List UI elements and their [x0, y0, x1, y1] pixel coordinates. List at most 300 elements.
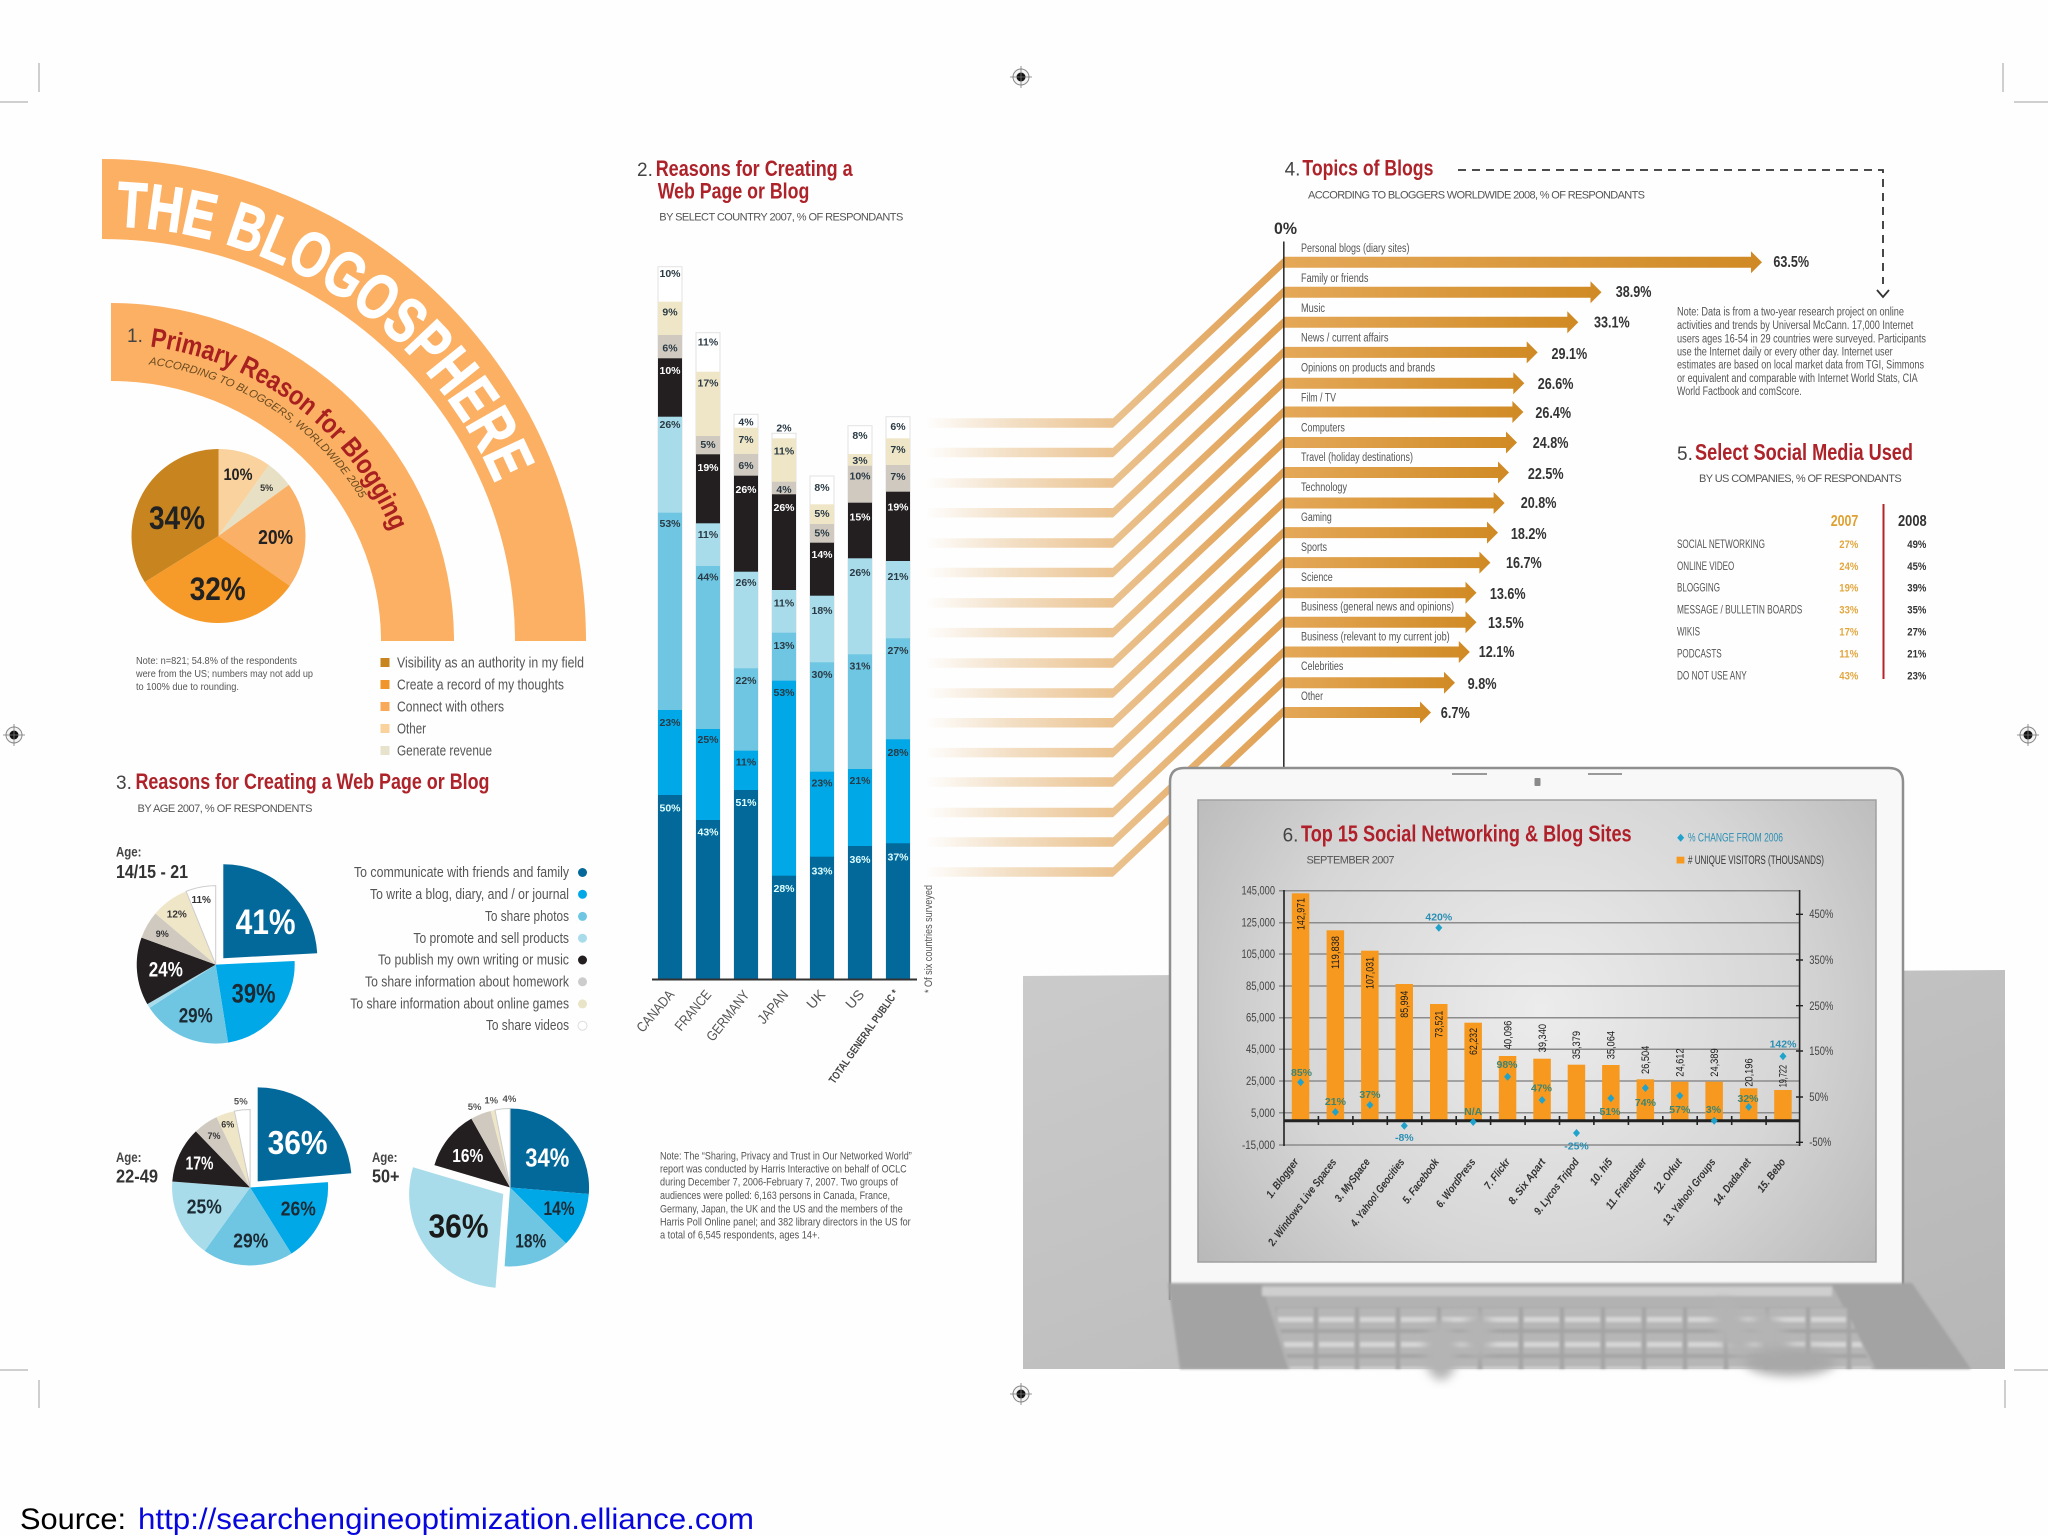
bar: total general public: 19% — [887, 502, 909, 514]
topic names: Business (relevant to my current job) — [1301, 632, 1450, 644]
bar values: 19,722 — [1778, 1065, 1790, 1087]
right axis labels: 350% — [1809, 955, 1833, 967]
left axis labels — [1242, 886, 1275, 1152]
topic values: 9.8% — [1468, 676, 1497, 693]
note: section 4: users ages 16-54 in 29 countries were surveyed. Participants — [1677, 333, 1926, 345]
table: social media by year: SOCIAL NETWORKING — [1677, 537, 1765, 551]
title arc: The Blogosphere: THE BLOGOSPHERE — [118, 181, 535, 482]
bar: UK: 23% — [811, 778, 833, 790]
site name labels: 2. Windows Live Spaces — [1266, 1157, 1339, 1249]
stacked bar chart: reasons by country — [652, 267, 917, 980]
table: social media by year: 49% — [1907, 539, 1926, 551]
topic names: Other — [1301, 691, 1323, 703]
topic names: Celebrities — [1301, 661, 1344, 673]
topic values: 33.1% — [1594, 315, 1630, 332]
bar: Canada: 23% — [659, 717, 681, 729]
table: social media by year: MESSAGE / BULLETIN BOARDS — [1677, 603, 1802, 617]
note: section 2: Note: The “Sharing, Privacy and Trust in Our Networked World” — [660, 1150, 912, 1162]
bar values: 119,838 — [1330, 936, 1342, 969]
percent change labels: 420% — [1425, 912, 1453, 924]
hands on keyboard — [1424, 1293, 1835, 1380]
table: social media by year: DO NOT USE ANY — [1677, 668, 1747, 682]
heading: section 4: 4. — [1285, 160, 1300, 181]
bar: Canada: 50% — [659, 802, 681, 814]
legend: primary reason: Visibility as an authority in my field — [397, 656, 584, 672]
bar: US — [848, 426, 872, 979]
percent change labels: 32% — [1737, 1093, 1759, 1105]
heading: section 4: Topics of Blogs — [1302, 156, 1433, 181]
bar: UK: 5% — [814, 528, 830, 540]
right axis labels: 450% — [1809, 909, 1833, 921]
legend: reasons by age: To share videos — [486, 1018, 569, 1034]
left axis labels: 125,000 — [1242, 918, 1275, 930]
bar: France: 5% — [700, 439, 716, 451]
right axis labels: 150% — [1809, 1046, 1833, 1058]
percent change labels: 85% — [1291, 1067, 1313, 1079]
heading: section 6 — [1283, 821, 1632, 866]
bar values: 20,196 — [1743, 1058, 1755, 1087]
topic values: 26.6% — [1538, 376, 1574, 393]
pie chart: age 50+: 1% — [484, 1096, 499, 1106]
percent change labels: N/A — [1464, 1106, 1483, 1118]
gridlines — [1279, 891, 1800, 1145]
table: social media by year: 19% — [1839, 583, 1858, 595]
table: social media by year: 33% — [1839, 605, 1858, 617]
chart legend: % CHANGE FROM 2006 — [1688, 833, 1783, 845]
note: section 4 — [1677, 307, 1926, 398]
bar: Germany: 22% — [735, 675, 757, 687]
bar values: 40,096 — [1502, 1021, 1514, 1049]
laptop screen — [1198, 800, 1876, 1262]
topic names: News / current affairs — [1301, 333, 1389, 345]
bar: France: 44% — [697, 572, 719, 584]
country labels: UK — [803, 986, 829, 1012]
heading: section 5 — [1677, 439, 1913, 485]
arrow: dashed pointer to note — [1458, 170, 1889, 297]
registration mark: bottom — [1010, 1383, 1032, 1405]
legend: reasons by age: To publish my own writing or music — [378, 952, 569, 968]
percent change labels: 51% — [1599, 1106, 1621, 1118]
label: age 22-49 — [116, 1149, 158, 1186]
bar values: 35,064 — [1606, 1031, 1618, 1059]
pie chart: age 50+: 36% — [428, 1208, 488, 1244]
site name labels: 7. Flickr — [1482, 1156, 1513, 1192]
heading: section 3: Reasons for Creating a Web Page or Blog — [136, 769, 490, 794]
registration mark: top — [1010, 66, 1032, 88]
bar: Canada: 6% — [662, 342, 678, 354]
topic values: 29.1% — [1552, 346, 1587, 363]
heading: section 5: BY US COMPANIES, % OF RESPONDANTS — [1699, 473, 1902, 485]
legend: reasons by age: To promote and sell products — [413, 931, 569, 947]
pie chart: age 22-49: 5% — [234, 1096, 248, 1108]
country labels: CANADA — [633, 986, 678, 1035]
bar: total general public: 7% — [890, 444, 906, 456]
country labels: TOTAL GENERAL PUBLIC * — [827, 987, 902, 1086]
pie chart: primary reason — [131, 449, 306, 623]
country labels: US — [842, 986, 867, 1012]
percent change labels — [1291, 912, 1797, 1152]
panel: primary reason for blogging — [111, 303, 584, 760]
note: section 4: Note: Data is from a two-year research project on online — [1677, 307, 1904, 319]
bar: Japan: 4% — [776, 484, 792, 496]
note: section 2: during December 7, 2006-February 7, 2007. Two groups of — [660, 1177, 899, 1189]
note: section 4: or equivalent and comparable with Internet World Stats, CIA — [1677, 373, 1918, 385]
bar: France: 19% — [697, 462, 719, 474]
percent change labels: 37% — [1359, 1089, 1381, 1101]
bar: France: 11% — [698, 529, 719, 541]
percent change labels: 47% — [1531, 1082, 1553, 1094]
pie chart: age 14/15-21: 12% — [167, 910, 187, 920]
note: section 2 — [660, 1150, 912, 1242]
heading: section 3: 3. — [116, 773, 132, 794]
legend: reasons by age: To communicate with friends and family — [354, 865, 570, 881]
note: section 1: to 100% due to rounding. — [136, 681, 239, 693]
topic arrows — [1284, 251, 1762, 724]
topic values: 12.1% — [1479, 644, 1515, 661]
bar: Germany: 4% — [738, 416, 754, 428]
table: social media by year: 45% — [1907, 561, 1926, 573]
label: age 50+ — [372, 1149, 400, 1186]
label: age 50+: 50+ — [372, 1166, 400, 1186]
bar: Canada: 10% — [659, 365, 681, 377]
country labels: FRANCE — [671, 987, 714, 1034]
percent change labels: -8% — [1395, 1132, 1414, 1144]
heading: section 6: SEPTEMBER 2007 — [1306, 854, 1394, 866]
bar: France: 25% — [697, 734, 719, 746]
title arc: The Blogosphere — [102, 159, 586, 641]
pie chart: age 22-49: 7% — [207, 1131, 221, 1141]
note: section 1: were from the US; numbers may not add up — [135, 668, 313, 680]
percent change labels: 57% — [1669, 1104, 1691, 1116]
country labels: GERMANY — [703, 987, 753, 1044]
bar: Japan: 11% — [774, 446, 795, 458]
panel: topics of blogs — [1274, 156, 1926, 771]
bar: Canada: 26% — [659, 419, 681, 431]
table: social media by year: 17% — [1839, 627, 1858, 639]
table: social media by year: 27% — [1839, 539, 1858, 551]
bar: Canada: 53% — [659, 518, 681, 530]
bar: US: 26% — [849, 567, 871, 579]
registration mark: right — [2017, 724, 2039, 746]
bar: UK: 18% — [811, 605, 833, 617]
bar values: 85,994 — [1399, 991, 1411, 1018]
pie chart: age 50+ — [409, 1094, 589, 1288]
left axis labels: 5,000 — [1251, 1108, 1275, 1120]
site name labels: 13. Yahoo! Groups — [1661, 1157, 1718, 1228]
percent change markers — [1297, 924, 1786, 1137]
bar: US: 15% — [849, 512, 871, 524]
topic names: Travel (holiday destinations) — [1301, 452, 1413, 464]
bar: Japan: 13% — [773, 640, 795, 652]
bar: Japan: 11% — [774, 598, 795, 610]
topic values: 22.5% — [1528, 466, 1564, 483]
bar: total general public: 37% — [887, 852, 909, 864]
photo background — [1023, 970, 2005, 1369]
bar: Japan: 53% — [773, 687, 795, 699]
pie chart: age 22-49: 6% — [221, 1120, 234, 1130]
pie chart: age 22-49 — [172, 1087, 351, 1265]
bar values: 39,340 — [1537, 1024, 1549, 1052]
heading: section 3 — [116, 769, 490, 815]
pie chart: age 50+: 16% — [452, 1146, 483, 1166]
laptop base and keyboard — [1168, 1283, 1971, 1369]
bar values: 35,379 — [1571, 1031, 1583, 1059]
pie chart: age 14/15-21: 39% — [232, 978, 276, 1008]
topic values: 16.7% — [1506, 555, 1542, 572]
bar: total general public: 21% — [887, 571, 909, 583]
table: social media by year — [1677, 504, 1927, 682]
bar: Japan — [772, 422, 796, 979]
topic values: 6.7% — [1441, 705, 1470, 722]
bar: Japan: 2% — [776, 422, 792, 434]
site name labels: 1. Blogger — [1264, 1156, 1302, 1201]
topic values: 38.9% — [1616, 284, 1652, 301]
heading: section 2 — [637, 156, 903, 224]
table: social media by year: 39% — [1907, 583, 1926, 595]
bar values: 24,389 — [1709, 1048, 1721, 1077]
bar chart: unique visitors — [1292, 893, 1792, 1121]
pie chart: age 22-49: 29% — [233, 1230, 268, 1252]
topic values: 20.8% — [1521, 495, 1557, 512]
label: age 14/15-21: 14/15 - 21 — [116, 862, 188, 882]
legend: reasons by age: To share information about homework — [365, 974, 570, 990]
percent change labels: 98% — [1496, 1059, 1518, 1071]
source line: http://searchengineoptimization.elliance.com — [138, 1503, 754, 1536]
note: section 2: audiences were polled: 6,163 persons in Canada, France, — [660, 1190, 890, 1202]
axis line — [1283, 242, 1285, 772]
topic names: Gaming — [1301, 512, 1332, 524]
pie chart: age 14/15-21: 29% — [179, 1004, 213, 1028]
left axis labels: 145,000 — [1242, 886, 1275, 898]
bar: Japan: 28% — [773, 883, 795, 895]
table: social media by year: 2008 — [1898, 513, 1927, 530]
percent change labels: 3% — [1706, 1104, 1722, 1116]
bar values: 62,232 — [1468, 1028, 1480, 1055]
heading: section 2: Web Page or Blog — [658, 178, 809, 203]
legend: primary reason: Connect with others — [397, 700, 504, 716]
note: section 4: World Factbook and comScore. — [1677, 386, 1802, 398]
pie chart: primary reason: 10% — [224, 465, 252, 484]
table: social media by year: 2007 — [1831, 513, 1858, 530]
bar values: 26,504 — [1640, 1046, 1652, 1074]
bar: US: 10% — [849, 470, 871, 482]
right axis labels: 250% — [1809, 1001, 1833, 1013]
table: social media by year: 43% — [1839, 670, 1858, 682]
bar: total general public: 6% — [890, 421, 906, 433]
bar: Canada — [658, 267, 682, 979]
site name labels: 12. Orkut — [1651, 1156, 1686, 1196]
topic names: Technology — [1301, 482, 1347, 494]
heading: section 2: 2. — [637, 160, 653, 181]
legend: primary reason: Generate revenue — [397, 744, 492, 760]
topic names: Science — [1301, 572, 1333, 584]
pie chart: age 14/15-21 — [137, 864, 317, 1044]
bar values: 142,971 — [1295, 898, 1307, 930]
right axis labels: -50% — [1809, 1137, 1831, 1149]
bar: Germany: 6% — [738, 460, 754, 472]
pie chart: primary reason: 5% — [260, 483, 273, 493]
legend: primary reason — [380, 656, 584, 760]
bar: US: 8% — [852, 430, 868, 442]
legend: reasons by age — [350, 865, 587, 1034]
heading: section 6: Top 15 Social Networking & Blog Sites — [1301, 821, 1632, 847]
left axis labels: 45,000 — [1246, 1044, 1275, 1056]
topic names: Music — [1301, 303, 1325, 315]
right axis labels: 50% — [1809, 1092, 1828, 1104]
table: social media by year: 27% — [1907, 627, 1926, 639]
site name labels — [1264, 1156, 1789, 1249]
bar: UK: 14% — [811, 549, 833, 561]
pie chart: primary reason: 32% — [190, 571, 246, 607]
pie chart: age 22-49: 36% — [268, 1124, 328, 1161]
note: section 4: activities and trends by Universal McCann. 17,000 Internet — [1677, 320, 1914, 332]
footnote: six countries: * Of six countries surveyed — [923, 885, 935, 993]
topic values: 13.6% — [1490, 586, 1526, 603]
topic names: Family or friends — [1301, 273, 1369, 285]
site name labels: 9. Lycos Tripod — [1532, 1156, 1582, 1217]
bar: US: 36% — [849, 854, 871, 866]
topic names: Personal blogs (diary sites) — [1301, 243, 1410, 255]
bar: UK: 33% — [811, 866, 833, 878]
bar: France: 17% — [697, 378, 719, 390]
bar: total general public — [886, 417, 910, 979]
note: section 1: Note: n=821; 54.8% of the respondents — [136, 655, 297, 667]
topic names: Business (general news and opinions) — [1301, 602, 1454, 614]
bar values — [1295, 898, 1790, 1087]
pie chart: age 14/15-21: 41% — [236, 903, 296, 942]
topic values: 13.5% — [1488, 615, 1524, 632]
bar: Japan: 26% — [773, 502, 795, 514]
note: section 2: Harris Poll Online panel; and 382 library directors in the US for — [660, 1217, 911, 1229]
bar: US: 21% — [849, 775, 871, 787]
laptop photo — [1023, 768, 2005, 1380]
bar: Germany: 51% — [735, 797, 757, 809]
percent change labels: 142% — [1770, 1038, 1797, 1050]
section 1 arc band and heading: Primary Reason for Blogging — [151, 328, 404, 530]
heading: section 2: BY SELECT COUNTRY 2007, % OF RESPONDANTS — [659, 212, 903, 224]
chart legend — [1677, 833, 1824, 867]
chart legend: # UNIQUE VISITORS (THOUSANDS) — [1688, 855, 1824, 867]
panel: top 15 social networking and blog sites — [1242, 821, 1833, 1249]
site name labels: 11. Friendster — [1604, 1156, 1650, 1212]
bar: UK — [810, 476, 834, 979]
heading: section 2: Reasons for Creating a — [656, 156, 853, 181]
percent change labels: 74% — [1635, 1097, 1657, 1109]
bar: US: 31% — [849, 660, 871, 672]
axes — [1284, 890, 1803, 1146]
right axis labels — [1809, 909, 1833, 1149]
topic names: Sports — [1301, 542, 1327, 554]
label: age 14/15-21: Age: — [116, 844, 142, 860]
site name labels: 10. hi5 — [1588, 1156, 1616, 1188]
pie chart: age 50+: 4% — [503, 1094, 517, 1105]
left axis labels: 25,000 — [1246, 1076, 1275, 1088]
panel: select social media used — [1677, 439, 1927, 682]
site name labels: 3. MySpace — [1333, 1157, 1373, 1205]
legend: reasons by age: To share information about online games — [350, 996, 569, 1012]
bar: total general public: 27% — [887, 645, 909, 657]
topic names — [1301, 243, 1454, 703]
site name labels: 6. WordPress — [1434, 1157, 1478, 1210]
note: section 1 — [135, 655, 313, 693]
note: section 4: use the Internet daily or every other day. Internet user — [1677, 347, 1893, 359]
left axis labels: 105,000 — [1242, 949, 1275, 961]
bar: US: 3% — [852, 455, 868, 467]
table: social media by year: WIKIS — [1677, 625, 1700, 639]
table: social media by year: 21% — [1907, 648, 1926, 660]
topic values: 26.4% — [1535, 405, 1571, 422]
bar values: 24,612 — [1674, 1048, 1686, 1077]
site name labels: 8. Six Apart — [1506, 1156, 1549, 1207]
country labels: JAPAN — [754, 987, 791, 1027]
heading: section 3: BY AGE 2007, % OF RESPONDENTS — [138, 803, 312, 815]
note: section 4: estimates are based on local market data from TGI, Simmons — [1677, 360, 1924, 372]
pie chart: age 50+: 14% — [544, 1199, 575, 1220]
bar: UK: 8% — [814, 482, 830, 494]
topic values: 18.2% — [1511, 526, 1547, 543]
panel: reasons by country — [633, 156, 935, 1242]
bar values: 107,031 — [1365, 957, 1377, 989]
note: section 2: a total of 6,545 respondents, ages 14+. — [660, 1230, 820, 1242]
site name labels: 4. Yahoo! Geocities — [1348, 1157, 1407, 1230]
panel: reasons by age — [116, 769, 589, 1288]
topic values: 63.5% — [1773, 254, 1809, 271]
bar: total general public: 28% — [887, 747, 909, 759]
country labels — [633, 986, 902, 1086]
legend: reasons by age: To write a blog, diary, and / or journal — [370, 887, 569, 903]
table: social media by year: 11% — [1839, 648, 1858, 660]
bar: Canada: 10% — [659, 268, 681, 280]
label: age 22-49: 22-49 — [116, 1166, 158, 1186]
bar values: 73,521 — [1434, 1011, 1446, 1038]
legend: primary reason: Other — [397, 722, 426, 738]
pie chart: age 14/15-21: 11% — [191, 895, 211, 906]
note: section 2: report was conducted by Harris Interactive on behalf of OCLC — [660, 1163, 907, 1175]
percent change labels: 21% — [1325, 1096, 1347, 1108]
bar: Germany: 11% — [736, 756, 757, 768]
table: social media by year: PODCASTS — [1677, 646, 1722, 660]
site name labels: 15. Bebo — [1755, 1156, 1789, 1195]
pie chart: age 50+: 34% — [525, 1142, 569, 1172]
heading: section 4 — [1285, 156, 1645, 202]
axis label: 0%: 0% — [1274, 219, 1297, 238]
topic values — [1441, 254, 1809, 722]
site name labels: 5. Facebook — [1400, 1156, 1442, 1206]
table: social media by year: BLOGGING — [1677, 581, 1720, 595]
site name labels: 14. Dada.net — [1711, 1156, 1755, 1208]
pie chart: age 50+: 5% — [468, 1102, 482, 1113]
heading: section 5: Select Social Media Used — [1695, 439, 1913, 465]
section 1 arc band and heading: 1. — [127, 326, 143, 347]
legend: reasons by age: To share photos — [485, 909, 569, 925]
pie chart: age 14/15-21: 24% — [149, 958, 183, 982]
left axis labels: -15,000 — [1242, 1140, 1275, 1152]
laptop lid — [1170, 768, 1903, 1300]
pie chart: age 22-49: 26% — [281, 1198, 316, 1220]
source line: Source: — [20, 1503, 126, 1536]
bar: total general public: 7% — [890, 471, 906, 483]
table: social media by year: 23% — [1907, 670, 1926, 682]
bar: France: 43% — [697, 826, 719, 838]
left axis labels: 65,000 — [1246, 1012, 1275, 1024]
topic values: 24.8% — [1533, 435, 1569, 452]
pie chart: age 22-49: 17% — [186, 1154, 214, 1174]
bar: Germany: 26% — [735, 484, 757, 496]
label: age 50+: Age: — [372, 1149, 398, 1165]
section 1 arc band and heading — [111, 303, 454, 641]
topic names: Computers — [1301, 422, 1345, 434]
connector stripes between country chart and topics chart — [925, 258, 1283, 877]
